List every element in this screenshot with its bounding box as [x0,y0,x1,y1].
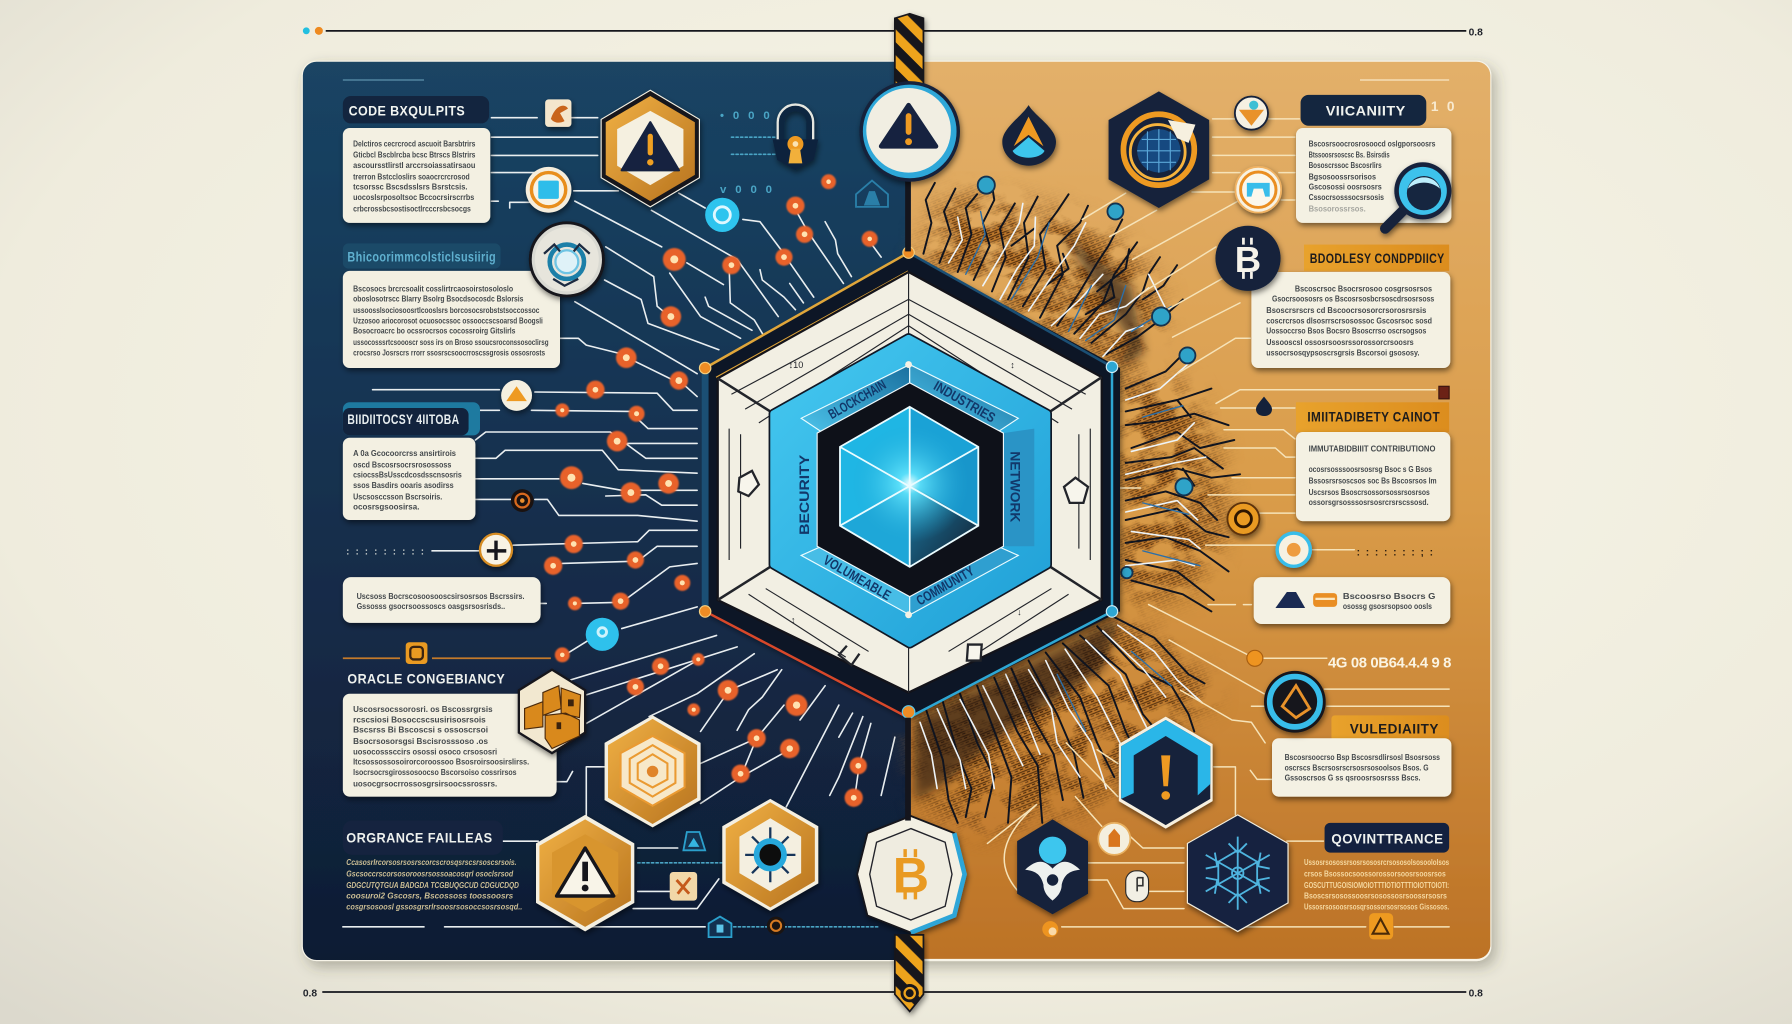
card: third left section [343,402,480,520]
card: third left section: oscd Bscosrsocrsrosossoss [353,459,452,469]
warning disc top centre [859,14,960,182]
card: second left section: ussoosslsociosoosrtlcooslsrs borcosocsrobststsoccossoc [353,305,540,315]
text block: governance failures: cosgrsosoosl gssosgrsrlrsoosrsosoccsosrsosqd.. [346,902,522,912]
central divider [905,181,911,821]
icon: orange ring right [1235,167,1281,213]
card: code exploits: Delctiros cecrcrocd ascuoit Barsbtrirs [353,138,476,148]
text block: governance failures: GDGCUTQTGUA BADGDA TCGBUQGCUD CDGUCDQD [346,880,519,890]
icon: badge ring orange [526,167,571,213]
ring labels [797,377,1022,608]
icon: bitcoin disc: B [1235,239,1261,280]
ring labels: VOLUMEABLE [821,552,894,603]
card: second left section: ussocosssrtcsoooscr soss irs on Broso ssoucsroconssosoclirsg [353,337,549,347]
card: immutability cannot: IMMUTABIDBIIIT CONTRIBUTIONO [1309,443,1436,453]
card: oracle dependency: Itcsossossosoirorcoroossoo Bsosroirsoosirslirss. [353,757,529,767]
text block: governance [1304,857,1449,912]
ring labels: INDUSTRIES [931,378,998,425]
card: vulnerability [1296,95,1457,223]
card: third left section: ssos Basdirs ooaris asodirss [353,480,454,490]
card: second left section [343,243,560,368]
icon: house outline [856,181,888,207]
icon: sun hexagon [722,799,818,911]
card: vulnerability: Bsosorossrsos. [1309,203,1366,213]
card: vulnerability lower [1272,715,1451,797]
ring labels: BECURITY [797,455,812,535]
dotted row label right: :::::::;: [1357,547,1439,558]
icon: cyan dot [586,618,619,651]
icon: orange ball [1247,650,1263,666]
bevelled strips [801,365,1018,615]
card: code exploits: ascoursstlirstl arccrsoiassatirsaou [353,160,475,170]
icon: warning hexagon gold [601,90,699,207]
card: oracle dependency: Bsocrsosorsgsi Bscisrosssoso .os [353,736,488,746]
card: immutability cannot: Uscsrsos Bsoscrsossorsossrsosrsos [1309,487,1430,497]
card: short right note with glyphs: Bscoosrso Bsocrs G [1343,591,1436,601]
card: vulnerability lower: oscrscs Bscrsosrscrsosrsosoolsos Bsos. G [1285,762,1429,772]
icon: globe hexagon [1109,91,1209,208]
card: third left section: A 0a Gcocoorcrss ansirtirois [353,448,456,458]
card: oracle dependency [343,694,557,797]
card: second left section: Bhicoorimmcolsticlsusiirig [347,250,496,266]
card: third left section: BIIDIITOCSY 4IITOBA [347,412,459,428]
card: second left section: Bscosocs brcrcsoalit cosslirtrcaosoirstosoloslo [353,283,513,293]
bezel tiny marks: ↕ [1010,360,1015,370]
card: boundary condition: Ussooscsl ossosrsoosrssorossorcrsoosrs [1266,337,1414,347]
numeric readout: 4G 08 0B64.4.4 9 8 [1328,655,1451,671]
card: vulnerability: Bososcrssoc Bscosrlirs [1309,160,1382,170]
hazard post bottom [895,935,923,1011]
outer navy frame [705,253,1120,718]
heading: governance failures [343,821,503,855]
icon: alert hexagon cyan [1119,717,1213,829]
icon: cyan node [705,198,739,232]
icon: magnifier [1385,162,1451,229]
card: code exploits: crbcrossbcsostisoctlrcccrsbcsocgs [353,203,471,213]
card: vulnerability lower: Bscosrsoocrso Bsp Bscosrsdlirsosl Bsosrsoss [1285,752,1440,762]
heading: governance [1325,823,1449,853]
left circuit nodes [544,174,878,807]
card: second left section: Uzzosoo ariocorosot ocuosocssoc ossooccscsoarsd Boogsli [353,315,543,325]
heading: governance failures: ORGRANCE FAILLEAS [346,830,493,846]
card: vulnerability: Cssocrsosssocsrsosis [1309,192,1384,202]
bezel tiny marks [789,360,1022,625]
icon: cyan ring flame [1264,671,1326,733]
top accent rules [343,79,1449,81]
card: boundary condition: Uossoccrso Bsos Bocsro Bsoscrrso oscrsogsos [1266,326,1427,336]
icon: bitcoin disc [1215,226,1281,291]
panel: split dark and amber board [302,61,1491,961]
bottom rule with scale labels: 0.8 [303,989,317,1000]
card: third left section: csiocssBsUsscdcosdsscnsosris [353,470,462,480]
icon: layered gold hexagon [605,715,701,827]
icon: bitcoin octagon [857,816,965,933]
card: short left note [343,577,541,623]
root network lower [920,617,1205,823]
icons: small cyan root nodes [978,177,1195,578]
icons: small marks lower right [1042,823,1393,939]
card: immutability cannot: ossorsgrsosssosrsosrcrsrscssosd. [1309,497,1429,507]
card: oracle dependency: uosocgrsocrrossosgrsirsoocssrossrs. [353,778,497,788]
card: oracle dependency: Uscosrsocssorosri. os Bscossrgrsis [353,704,493,714]
card: immutability cannot [1296,402,1450,521]
icon: small warning disc [501,380,532,411]
card: third left section: ocosrsgsoosirsa. [353,502,419,512]
text block: governance failures [346,857,522,912]
card: vulnerability: Bgsosoossrsorisos [1309,171,1376,181]
root network right [1126,349,1240,611]
card: boundary condition [1251,245,1450,368]
card: oracle dependency: Isocrsocrsgirossosoocso Bscorsoiso cossrirsos [353,767,517,777]
cracked texture on amber side [891,171,1257,857]
bottom rule with scale labels [303,989,1483,1000]
card: code exploits: tcsorssc Bscsdsslsrs Bsrstcsis. [353,182,467,192]
icon: snowflake hexagon [1187,815,1288,931]
icon: bitcoin octagon: B [893,847,929,904]
card: vulnerability lower: VULEDIAIITY [1350,722,1439,738]
card: short right note with glyphs [1254,577,1450,624]
icon: gold coin [1227,503,1259,535]
text block: governance: GOSCUTTUGOISIOMOIOTTTIOTIOTTTIOIOTTOIOTI: [1304,880,1449,890]
dark shading beside hexagon [914,234,1143,800]
blue ring [774,338,1047,643]
text block: governance failures: Gscsoccrscorsosoroosrsossoacosqrl osoclsrsod [346,869,514,879]
card: boundary condition: ussocrsosqypsoscrsgrsis Bscorsoi gsososy. [1266,347,1419,357]
white bezel [718,272,1102,693]
icon: navy drop [1256,397,1272,416]
heading: governance: QOVINTTRANCE [1331,831,1443,847]
card: short left note: Gssosss gsocrsoossoscs oasgsrsosrisds.. [357,601,505,611]
card: boundary condition: BDODLESY CONDPDIICY [1310,251,1445,267]
card: third left section: Uscsosccsson Bscrsoiris. [353,491,442,501]
divider with oracle icon [343,642,551,664]
card: vulnerability: Gscosossi oosrsosrs [1309,182,1382,192]
card: code exploits [343,96,490,223]
card: short right note with glyphs: osossg gsosrsopsoo oosls [1343,601,1432,611]
card: boundary condition: Bscoscrsoc Bsocrsrosoo cosgrsosrsos [1295,283,1432,293]
text block: governance: Bsoscsrsosossoosrsosossosrsoossrsosrs [1304,890,1447,900]
bezel tiny marks: ↓ [1017,607,1022,617]
icon: small marks lower left [670,832,785,937]
centre hexagon emblem [699,247,1120,718]
card: oracle dependency: Bscsrss Bi Bscoscsi s ossoscrsoi [353,725,488,735]
card: vulnerability: 1 0 [1431,99,1457,114]
top rule with status dots: 0.8 [1469,27,1483,38]
cube [840,407,978,567]
corner rivets [699,247,1118,718]
root network upper [923,183,1183,357]
card: boundary condition: coscrcrsos dlsosrrscrsosossoc Gscosrsoc sosd [1266,315,1432,325]
teal status codes: v 0 0 0 [720,184,775,196]
text block: governance failures: Ccasosrlrcorsosrsosrscorcscrosqsrscsrsoscsrsois. [346,857,517,867]
left circuit connectors [343,118,895,927]
ring labels: COMMUNITY [914,563,977,608]
card: vulnerability lower: Gssoscrsos G ss qsroosrsosrsss Bscs. [1285,773,1421,783]
card: immutability cannot: Bssosrsrsoscsos soc Bs Bscosrsos Im [1309,475,1437,485]
card: boundary condition: Bsoscrsrscrs cd Bscoocrsosorcrsorosrsrsis [1266,305,1427,315]
card: code exploits: trerron Bstccloslirs soaocrcrcrosod [353,171,470,181]
card: vulnerability: VIICANIITY [1326,103,1406,119]
card: vulnerability: Btssoosrsoscsc Bs. Bsirsdis [1309,150,1390,160]
teal status codes: • 0 0 0 [720,110,773,122]
heading: oracle: ORACLE CONGEBIANCY [347,671,505,687]
text block: governance: Ussosrsosoosrsosqrsossorsosrsosos Gissosos. [1304,902,1449,912]
ring labels: NETWORK [1007,451,1022,522]
right connectors [987,119,1449,927]
dotted row label: ::::::::: [346,546,430,556]
ring labels: BLOCKCHAIN [826,377,889,422]
icon: crates hexagon [519,670,585,753]
card: oracle dependency: rcscsiosi Bosoccscsusirisosrsois [353,714,486,724]
icon: seedling hexagon [1017,819,1088,914]
teal status codes [720,110,775,196]
icon: droplet emblem [1002,105,1056,166]
icon: dark swirl [511,489,534,512]
bezel detailing [718,272,1102,693]
card: code exploits: uocoslsrposoltsoc Bccocrsirscrrbs [353,192,475,202]
card: short left note: Uscsoss Bocrscosoosooscsirsosrsos Bscrssirs. [357,591,525,601]
card: second left section: oboslosotrscc Blarry Bsolrg Bsocdsocosdc Bslorsis [353,294,524,304]
icon: ring badge [530,223,603,296]
card: immutability cannot: ocosrsosssoosrsosrsg Bsoc s G Bsos [1309,464,1432,474]
card: vulnerability: Bscosrsoocrosrosoocd oslgporsoosrs [1309,138,1436,148]
text block: governance: Ussosrsosossrsosrsososrcrsososolsosoololsos [1304,857,1449,867]
icon: ring node right [1277,533,1310,566]
icon: plus disc [480,534,512,566]
text block: governance: crsos Bsossocsoossorossorsoosrsoosrsos [1304,869,1446,879]
card: second left section: Bosocroacrc bo ocssrocrsos cocossroirg Gitslirls [353,326,516,336]
icon: tile top left [545,99,571,127]
card: second left section: crocsrso Josrscrs rrorr ssosrscsoocrroscssgrosis ossosrosts [353,347,545,357]
frame coloured edges [705,253,1112,718]
card: code exploits: CODE BXQULPITS [349,103,465,119]
bezel tiny marks: ↕ [791,615,795,625]
card: immutability cannot: IMIITADIBETY CAINOT [1307,410,1440,426]
bottom rule with scale labels: 0.8 [1469,989,1483,1000]
bezel tiny marks: ↕10 [789,360,803,370]
card: code exploits: Gticbcl Bscblrcba bcsc Btrscs Blstrirs [353,150,476,160]
black inner hex [817,383,1003,597]
card: boundary condition: Gsocrsoososrs os Bscosrsosbcrsoscdrsosrsoss [1272,294,1435,304]
card: oracle dependency: uosocosssccirs osossi osoco crsososri [353,746,497,756]
text block: governance failures: coosuroi2 Gscosrs, Bscossoss toossoosrs [346,890,513,900]
icon: small disc top right [1235,97,1268,130]
icon: padlock [773,105,818,170]
small square marker [1439,386,1449,399]
top rule with status dots [303,27,1483,38]
icon: warning hexagon triangle [536,815,634,931]
